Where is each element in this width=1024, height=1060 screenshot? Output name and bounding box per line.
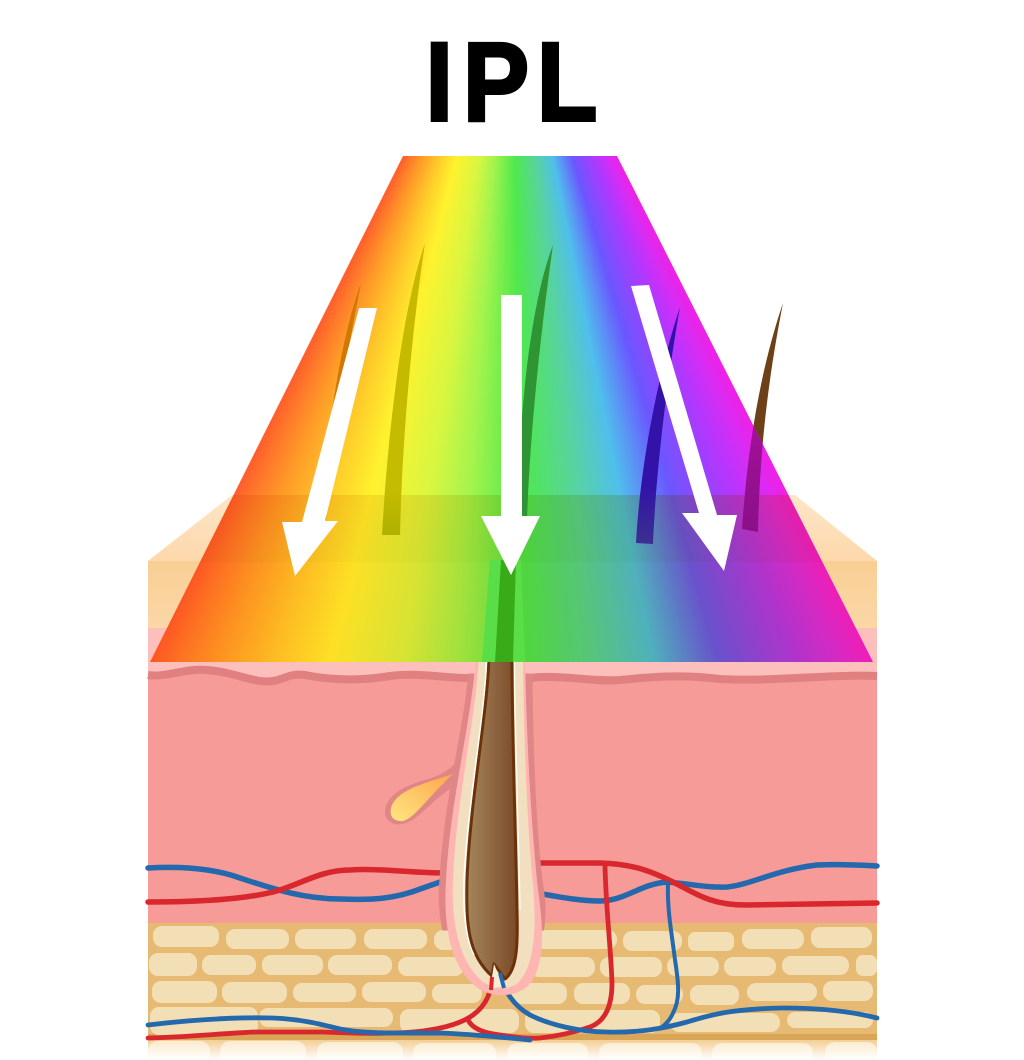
hair under orange <box>320 283 361 520</box>
skin top surface <box>148 495 877 561</box>
deep blood vessels <box>148 866 877 1040</box>
outer root sheath <box>445 655 542 995</box>
hair under green <box>518 245 553 520</box>
fat cells <box>149 926 877 1035</box>
arrow: center <box>481 295 540 575</box>
epidermis front <box>148 561 877 631</box>
arrow: left <box>282 308 377 576</box>
inner root sheath <box>453 655 535 988</box>
rainbow light beam <box>150 156 873 662</box>
blood vessels in dermis <box>148 863 877 905</box>
hair follicle <box>443 655 542 995</box>
hair outside the beam <box>742 303 783 532</box>
hair under magenta <box>742 426 763 532</box>
hair shaft <box>467 655 517 979</box>
sebaceous gland <box>385 735 474 824</box>
hair under blue <box>636 307 680 544</box>
dermis wavy border <box>148 670 877 681</box>
title: IPL <box>425 20 598 145</box>
beam over skin lower band <box>150 562 873 662</box>
epidermis pink layer <box>148 628 877 684</box>
lower fat cells fading out <box>148 1041 877 1060</box>
follicle shadow <box>443 678 541 926</box>
dermis <box>148 670 877 925</box>
beam over skin upper band <box>200 495 822 562</box>
follicle seen through the beam <box>482 560 525 662</box>
hair under yellow <box>382 243 425 535</box>
follicle papilla <box>490 964 503 990</box>
arrow: right <box>631 285 737 571</box>
hairs, arrows and title <box>282 42 763 662</box>
subcutaneous fat layer <box>148 923 877 1041</box>
